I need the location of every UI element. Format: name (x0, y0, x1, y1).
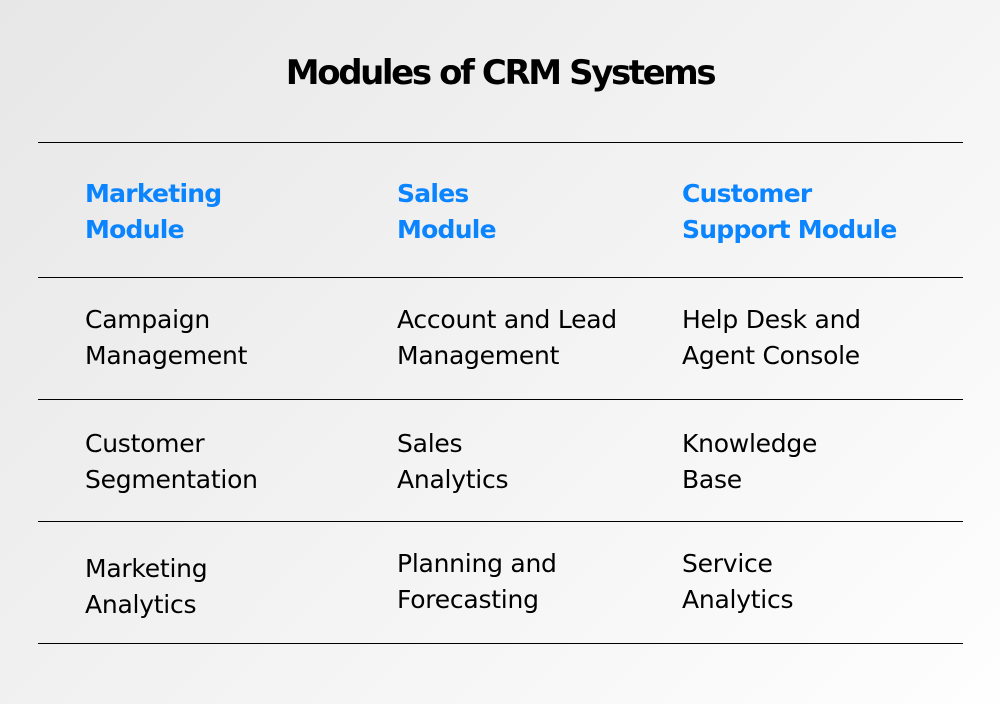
cell: planning and forecasting: Forecasting (397, 585, 539, 614)
cell: help desk: Agent Console (682, 341, 860, 370)
cell: account and lead management (397, 305, 617, 370)
cell: sales analytics: Sales (397, 429, 462, 458)
cell: help desk: Help Desk and (682, 305, 861, 334)
cell: service analytics (682, 549, 793, 614)
cell: campaign management (85, 305, 247, 370)
cell: marketing analytics: Marketing (85, 554, 207, 583)
cell: account and lead management: Account and Lead (397, 305, 617, 334)
cell: sales analytics (397, 429, 508, 494)
column heading: customer support: Support Module (682, 215, 897, 244)
cell: customer segmentation: Segmentation (85, 465, 258, 494)
cell: sales analytics: Analytics (397, 465, 508, 494)
cell: service analytics: Analytics (682, 585, 793, 614)
column heading: marketing (85, 179, 221, 244)
column heading: marketing: Marketing (85, 179, 221, 208)
cell: planning and forecasting: Planning and (397, 549, 557, 578)
cell: knowledge base (682, 429, 817, 494)
cell: knowledge base: Base (682, 465, 742, 494)
column heading: marketing: Module (85, 215, 184, 244)
cell: marketing analytics: Analytics (85, 590, 196, 619)
cell: customer segmentation (85, 429, 258, 494)
cell: planning and forecasting (397, 549, 557, 614)
column heading: customer support: Customer (682, 179, 812, 208)
cell: campaign management: Campaign (85, 305, 210, 334)
column heading: customer support (682, 179, 897, 244)
cell: help desk (682, 305, 861, 370)
cell: campaign management: Management (85, 341, 247, 370)
cell: marketing analytics (85, 554, 207, 619)
title: Modules of CRM Systems (286, 53, 714, 93)
cell: customer segmentation: Customer (85, 429, 204, 458)
column heading: sales: Sales (397, 179, 469, 208)
column heading: sales (397, 179, 496, 244)
cell: account and lead management: Management (397, 341, 559, 370)
cell: knowledge base: Knowledge (682, 429, 817, 458)
cell: service analytics: Service (682, 549, 773, 578)
column heading: sales: Module (397, 215, 496, 244)
